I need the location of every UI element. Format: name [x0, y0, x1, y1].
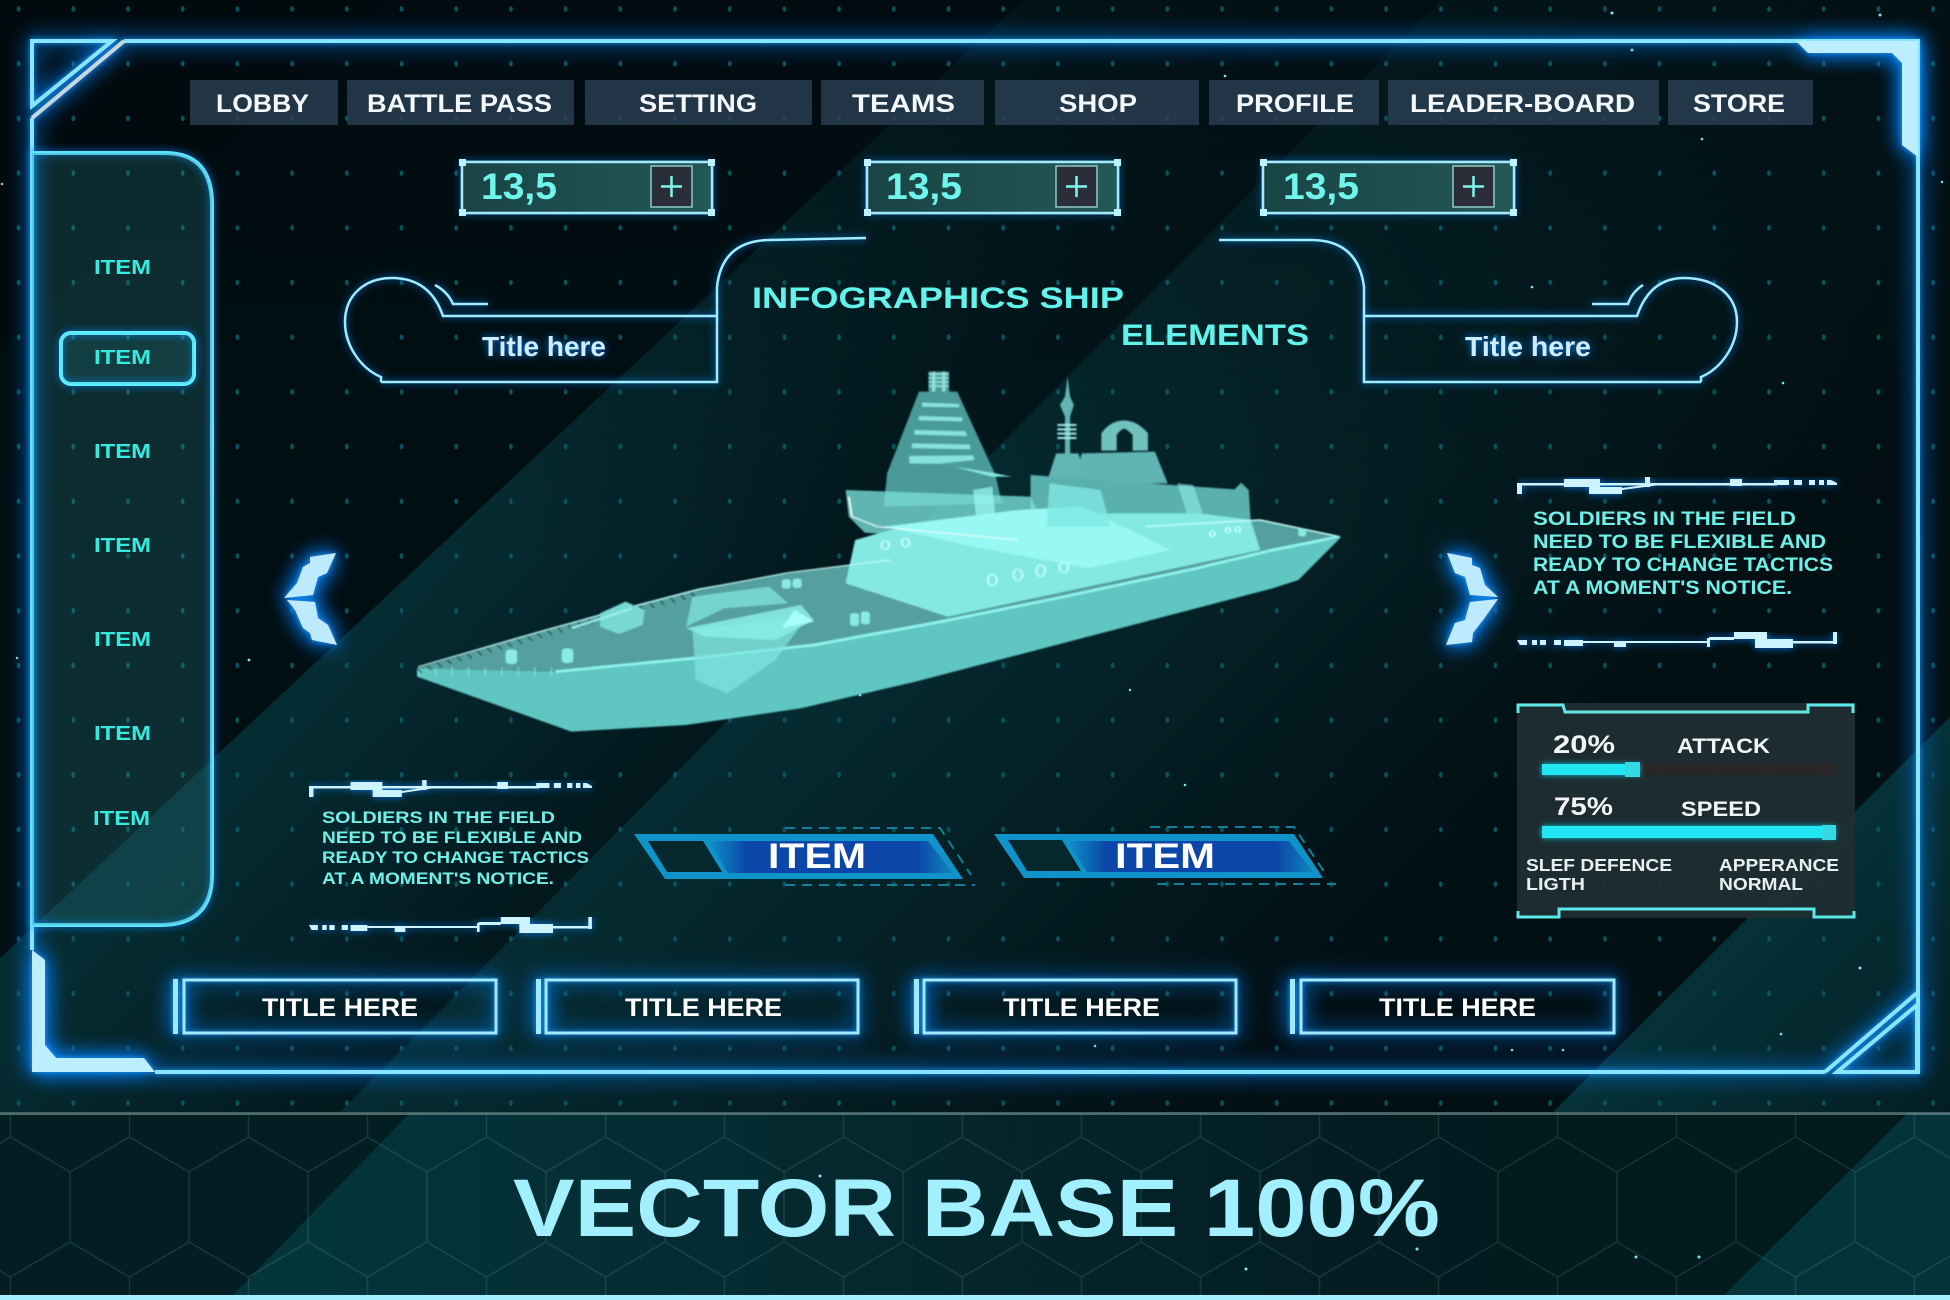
left arrow [284, 553, 337, 645]
value box 1 [459, 159, 715, 216]
navigation menu: LEADER-BOARD [1410, 90, 1635, 118]
info text left [309, 780, 592, 933]
missile launchers [686, 587, 814, 693]
footer headline: VECTOR BASE 100% [513, 1163, 1440, 1254]
title button 1 [173, 979, 496, 1034]
deck [417, 520, 1340, 672]
navigation menu: TEAMS [852, 90, 955, 118]
title button 4: TITLE HERE [1379, 994, 1536, 1022]
info text left: READY TO CHANGE TACTICS [322, 849, 589, 867]
navigation menu: STORE [1693, 90, 1785, 118]
speed stat: SPEED [1681, 798, 1761, 821]
item banner 2 [994, 827, 1336, 884]
attributes [1526, 855, 1839, 894]
title button 1: TITLE HERE [262, 994, 418, 1022]
hull side [417, 538, 1340, 732]
value box 2 [864, 159, 1121, 216]
title plate left [345, 238, 866, 382]
heading: ELEMENTS [1121, 319, 1309, 352]
item banner 2: ITEM [1115, 837, 1215, 876]
heading [752, 282, 1309, 352]
info text right [1517, 477, 1837, 648]
navigation menu: BATTLE PASS [367, 90, 552, 118]
attributes: NORMAL [1719, 874, 1803, 894]
info text left: NEED TO BE FLEXIBLE AND [322, 829, 582, 847]
info text right: AT A MOMENT'S NOTICE. [1533, 578, 1792, 599]
attack stat: ATTACK [1677, 735, 1770, 758]
title button 3 [914, 979, 1236, 1034]
navigation menu: LOBBY [216, 90, 309, 118]
side item panel: ITEM [94, 347, 151, 369]
frame corner top-left [32, 41, 124, 118]
title plate left: Title here [482, 331, 606, 362]
speed stat: 75% [1554, 793, 1613, 821]
bright central deck [884, 507, 1171, 568]
navigation menu [190, 80, 1813, 125]
value box 1: 13,5 [481, 166, 557, 207]
radar mast [1047, 377, 1088, 483]
title plate right: Title here [1465, 331, 1591, 362]
value box 3 [1260, 159, 1517, 216]
stats panel [1517, 703, 1855, 918]
radar box with arch [1075, 424, 1168, 483]
aft block [1031, 475, 1251, 523]
deck fittings [506, 528, 1306, 664]
title button 3: TITLE HERE [1003, 994, 1160, 1022]
value box 3: 13,5 [1283, 166, 1359, 207]
side item panel: ITEM [94, 629, 151, 651]
attributes: LIGTH [1526, 874, 1585, 894]
heading: INFOGRAPHICS SHIP [752, 282, 1124, 315]
attributes: APPERANCE [1719, 855, 1839, 875]
right arrow [1446, 553, 1498, 645]
info text right: READY TO CHANGE TACTICS [1533, 555, 1833, 576]
title button 2 [536, 979, 858, 1034]
side item panel: ITEM [94, 441, 151, 463]
title plate right [1219, 240, 1737, 382]
navigation menu: SHOP [1059, 90, 1137, 118]
side item panel [32, 153, 212, 925]
item banner 1: ITEM [768, 837, 866, 876]
navigation menu: SETTING [639, 90, 757, 118]
title button 2: TITLE HERE [625, 994, 782, 1022]
navigation menu: PROFILE [1236, 90, 1354, 118]
side item panel: ITEM [94, 535, 151, 557]
outer HUD frame [32, 41, 1918, 1072]
value box 2: 13,5 [886, 166, 962, 207]
info text left: SOLDIERS IN THE FIELD [322, 809, 555, 827]
bridge deck [846, 490, 1043, 543]
frame corner bottom-left [32, 950, 155, 1072]
forward gun [571, 602, 645, 634]
side item panel: ITEM [94, 723, 151, 745]
footer band [0, 1112, 1950, 1300]
info text right: NEED TO BE FLEXIBLE AND [1533, 532, 1826, 553]
title button 4 [1290, 979, 1614, 1034]
item banner 1 [634, 828, 975, 885]
side item panel: ITEM [93, 808, 150, 830]
hologram ship [417, 372, 1340, 732]
main tower [884, 372, 1002, 507]
lower superstructure [846, 513, 1260, 617]
frame corner top-right [1796, 41, 1918, 157]
info text left: AT A MOMENT'S NOTICE. [322, 870, 554, 888]
frame corner bottom-right [1825, 993, 1917, 1072]
info text right: SOLDIERS IN THE FIELD [1533, 509, 1796, 530]
attack stat: 20% [1553, 731, 1615, 759]
attack stat [1542, 731, 1835, 777]
portholes [881, 527, 1240, 586]
speed stat [1542, 793, 1836, 840]
highlighted item [61, 333, 194, 384]
attributes: SLEF DEFENCE [1526, 855, 1672, 875]
side item panel: ITEM [94, 257, 151, 279]
deck rails [418, 497, 1340, 672]
